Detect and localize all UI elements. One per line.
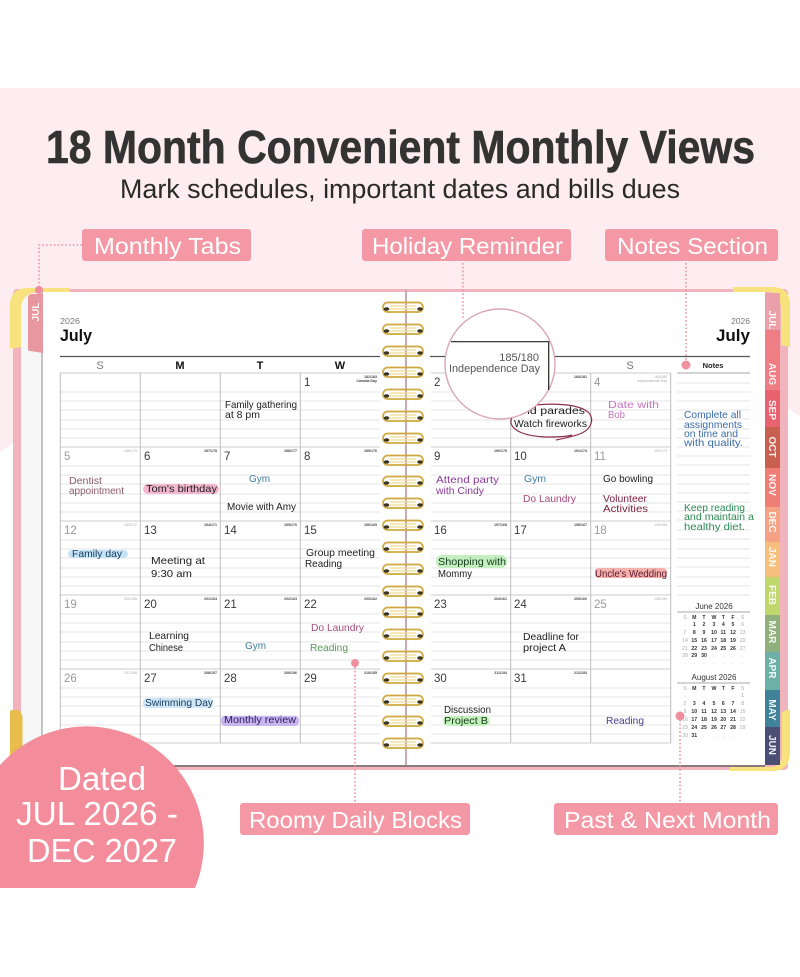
notes handwritten text: healthy diet. [684, 521, 745, 533]
mini calendar: August 2026: . [742, 733, 743, 739]
mini calendar: June 2026: 9 [703, 630, 706, 636]
handwritten entries left page: Chinese [149, 642, 183, 654]
right page date numbers: 211/154 [494, 671, 507, 675]
handwritten entries right page: Watch fireworks [514, 418, 587, 430]
left page date numbers: 19 [64, 599, 77, 611]
handwritten entries right page: with Cindy [435, 485, 485, 497]
left page date numbers: 195/170 [284, 523, 297, 527]
mini calendar: August 2026: 1 [741, 693, 744, 699]
mini calendar: August 2026: . [723, 733, 724, 739]
handwritten entries right page: Volunteer [603, 493, 647, 505]
handwritten entries right page [435, 399, 667, 727]
left page date numbers: 7 [224, 451, 230, 463]
handwritten entries right page: Attend party [436, 474, 500, 486]
mini calendar: August 2026: 14 [730, 709, 736, 715]
fireworks hand-drawn circle [511, 404, 592, 440]
left calendar grid [60, 373, 380, 743]
right page date numbers: 9 [434, 451, 440, 463]
callout: monthly tabs [35, 229, 251, 294]
left page date numbers: 14 [224, 525, 237, 537]
right colored month tabs: SEP [766, 400, 777, 420]
right page date numbers: Independence Day [637, 379, 667, 383]
left page date numbers: 196/169 [364, 523, 377, 527]
mini calendar: June 2026: 12 [730, 630, 736, 636]
mini calendar: August 2026: 16 [682, 717, 688, 723]
mini calendar: June 2026: . [713, 653, 715, 659]
mini calendar: June 2026: 10 [711, 630, 717, 636]
handwritten entries right page: Discussion [444, 704, 491, 716]
mini calendar: June 2026: . [723, 660, 724, 666]
handwritten entries left page: Movie with Amy [227, 501, 297, 513]
mini calendar: August 2026: . [713, 693, 715, 699]
handwritten entries right page: Bob [608, 409, 625, 421]
mini calendar: August 2026: 9 [684, 709, 687, 715]
mini calendar: June 2026: 29 [691, 653, 697, 659]
mini calendar: June 2026: 16 [701, 638, 707, 644]
left page weekday header [60, 356, 380, 372]
handwritten entries left page: Group meeting [306, 547, 375, 559]
mini calendar: August 2026: . [684, 693, 686, 699]
left page month heading: 2026 [60, 316, 80, 326]
callout: monthly tabs: Monthly Tabs [94, 233, 241, 259]
left page date numbers: 207/158 [124, 671, 137, 675]
mini calendar: August 2026: . [694, 693, 695, 699]
mini calendar: August 2026: . [713, 733, 715, 739]
right colored month tabs: OCT [766, 436, 777, 458]
right page date numbers: 4 [594, 377, 601, 389]
left page date numbers: 12 [64, 525, 77, 537]
right page date numbers: 25 [594, 599, 607, 611]
mini calendar: June 2026: . [742, 653, 743, 659]
callout: roomy daily blocks: Roomy Daily Blocks [249, 807, 462, 833]
mini calendar: June 2026: 4 [722, 622, 725, 628]
handwritten entries left page: Gym [245, 640, 266, 652]
mini calendar: August 2026: W [712, 686, 717, 692]
mini calendar: August 2026: 24 [691, 725, 697, 731]
mini calendar: June 2026 [677, 602, 750, 666]
right page date numbers: 192/173 [654, 449, 667, 453]
right page date numbers: 11 [594, 451, 606, 463]
mini calendar: August 2026: 15 [740, 709, 746, 715]
pink background band [0, 88, 800, 452]
mini calendar: June 2026: 22 [691, 646, 697, 652]
right page month heading [716, 316, 751, 345]
mini calendar: June 2026: 17 [711, 638, 717, 644]
right page date numbers: 185/180 [654, 375, 667, 379]
left page date numbers: 29 [304, 673, 317, 685]
handwritten entries right page: Mommy [438, 568, 473, 580]
right colored month tabs: JUN [766, 735, 777, 755]
mini calendar: August 2026: . [703, 693, 705, 699]
magnifier: holiday reminder [445, 309, 555, 419]
left page date numbers: 186/179 [124, 449, 137, 453]
left page date numbers: 22 [304, 599, 317, 611]
mini calendar: August 2026: 28 [730, 725, 736, 731]
callout: roomy daily blocks [240, 659, 470, 835]
handwritten entries right page: Activities [603, 503, 648, 515]
handwritten entries left page: Meeting at [151, 555, 205, 567]
left page date numbers: 8 [304, 451, 310, 463]
notes handwritten text: Keep reading [684, 502, 745, 514]
mini calendar: August 2026: 20 [720, 717, 726, 723]
left page date numbers: 27 [144, 673, 157, 685]
handwritten entries left page: Dentist [69, 475, 102, 487]
mini calendar: August 2026: 17 [691, 717, 697, 723]
left page date numbers: 20 [144, 599, 157, 611]
mini calendar: June 2026: . [732, 660, 734, 666]
handwritten entries right page: Attend parades [501, 405, 585, 417]
mini calendar: June 2026: 14 [682, 638, 688, 644]
left page date numbers: 201/164 [204, 597, 217, 601]
mini calendar: June 2026: S [683, 615, 687, 621]
right page weekday header: Notes [703, 361, 723, 370]
mini calendar: August 2026: . [732, 693, 734, 699]
mini calendar: June 2026: 24 [711, 646, 717, 652]
left page weekday header: W [335, 360, 346, 372]
mini calendar: August 2026: 4 [703, 701, 706, 707]
callout: past and next month [554, 712, 778, 835]
right colored month tabs: MAY [766, 699, 777, 721]
left page date numbers: 5 [64, 451, 70, 463]
mini calendar: June 2026: 26 [730, 646, 736, 652]
mini calendar: June 2026: . [684, 660, 686, 666]
right colored month tabs: FEB [766, 585, 777, 605]
right page weekday header [430, 356, 750, 372]
left month tab: JUL [31, 303, 42, 321]
right page date numbers: 198/167 [574, 523, 587, 527]
mini calendar: June 2026: 3 [713, 622, 716, 628]
mini calendar: June 2026: . [723, 653, 724, 659]
right page date numbers: 212/153 [574, 671, 587, 675]
mini calendar: June 2026: W [712, 615, 717, 621]
mini calendar: June 2026: . [742, 660, 743, 666]
mini calendar: August 2026: 12 [711, 709, 717, 715]
handwritten entries left page: Family gathering [225, 399, 297, 411]
right colored month tabs: DEC [766, 511, 777, 533]
mini calendar: August 2026: 10 [691, 709, 697, 715]
handwritten entries right page: Gym [524, 473, 546, 485]
right page date numbers [434, 375, 667, 685]
mini calendar: August 2026: 19 [711, 717, 717, 723]
right page month heading: 2026 [731, 316, 750, 326]
handwritten entries right page: Uncle's Wedding [595, 568, 667, 580]
right colored month tabs: NOV [766, 474, 777, 496]
right page date numbers: 10 [514, 451, 527, 463]
handwritten entries right page: Date with [608, 399, 659, 411]
right colored month tabs: APR [766, 657, 777, 679]
mini calendar: August 2026: 26 [711, 725, 717, 731]
right colored month tabs [765, 293, 780, 765]
right page weekday header: S [626, 360, 634, 372]
spiral binding [383, 302, 423, 748]
right page date numbers: 205/160 [574, 597, 587, 601]
date range badge: DEC 2027 [27, 832, 177, 869]
handwritten entries right page: project A [523, 642, 566, 654]
right page date numbers: 204/161 [494, 597, 507, 601]
mini calendar: June 2026: . [713, 660, 715, 666]
left page month heading: July [60, 326, 92, 345]
handwritten entries left page: Monthly review [224, 714, 296, 726]
callout: holiday reminder: Holiday Reminder [372, 233, 563, 259]
callout: holiday reminder [362, 229, 571, 320]
left page date numbers: 26 [64, 673, 77, 685]
callout: notes section: Notes Section [617, 233, 768, 259]
mini calendar: June 2026: 13 [740, 630, 746, 636]
right page date numbers: 197/168 [494, 523, 507, 527]
mini calendar: August 2026: 30 [682, 733, 688, 739]
left page date numbers: 209/156 [284, 671, 297, 675]
handwritten entries left page: Family day [72, 548, 123, 560]
mini calendar: August 2026: 2 [684, 701, 687, 707]
handwritten entries left page: at 8 pm [225, 409, 260, 421]
handwritten entries left page: 9:30 am [151, 568, 192, 580]
mini calendar: August 2026: T [702, 686, 706, 692]
right page date numbers: 199/166 [654, 523, 667, 527]
notes handwritten text: Complete all [684, 409, 741, 421]
left page date numbers: 1 [304, 377, 310, 389]
left page date numbers: 203/162 [364, 597, 377, 601]
mini calendar: August 2026: S [741, 686, 745, 692]
left page date numbers: 208/157 [204, 671, 217, 675]
left page weekday header: T [257, 360, 264, 372]
mini calendar: August 2026: . [732, 733, 734, 739]
mini calendar: June 2026: . [694, 660, 695, 666]
mini calendar: June 2026: 8 [693, 630, 696, 636]
planner cover [13, 289, 788, 770]
notes handwritten text [683, 409, 754, 533]
mini calendar: August 2026: 11 [701, 709, 707, 715]
right page date numbers: 190/175 [494, 449, 507, 453]
handwritten entries left page: Swimming Day [145, 697, 214, 709]
date range badge: Dated [58, 760, 146, 797]
handwritten entries right page: Reading [606, 715, 644, 727]
date range badge [0, 726, 204, 888]
mini calendar: August 2026: 5 [713, 701, 716, 707]
callout: past and next month: Past & Next Month [564, 807, 771, 833]
mini calendar: August 2026: 13 [720, 709, 726, 715]
left page date numbers: 188/177 [284, 449, 297, 453]
right page month heading: July [716, 326, 751, 345]
left page date numbers: 6 [144, 451, 150, 463]
mini calendar: June 2026: 19 [730, 638, 736, 644]
mini calendar: June 2026: 30 [701, 653, 707, 659]
left month tab [28, 294, 43, 353]
date range badge: JUL 2026 - [16, 795, 178, 832]
mini calendar: June 2026: 6 [741, 622, 744, 628]
planner right page [407, 292, 765, 765]
right page date numbers: 184/181 [574, 375, 587, 379]
handwritten entries left page: Do Laundry [311, 622, 365, 634]
mini calendar: August 2026: F [731, 686, 735, 692]
mini calendar: June 2026: 5 [732, 622, 735, 628]
mini calendar: June 2026: . [732, 653, 734, 659]
mini calendar: August 2026: 25 [701, 725, 707, 731]
magnifier: holiday reminder: Independence Day [449, 363, 540, 375]
mini calendar: August 2026: 27 [720, 725, 726, 731]
notes handwritten text: and maintain a [684, 511, 754, 523]
mini calendar: August 2026: T [722, 686, 726, 692]
notes handwritten text: on time and [684, 428, 738, 440]
right page date numbers: 16 [434, 525, 447, 537]
mini calendar: August 2026: 6 [722, 701, 725, 707]
right page date numbers: 191/174 [574, 449, 587, 453]
notes handwritten text: assignments [684, 419, 742, 431]
left page weekday header: M [175, 360, 185, 372]
right page date numbers: 24 [514, 599, 527, 611]
handwritten entries left page: Learning [149, 630, 189, 642]
handwritten entries left page: Tom's birthday [146, 483, 218, 495]
mini calendar: August 2026: 3 [693, 701, 696, 707]
left page date numbers: 182/183 [364, 375, 377, 379]
right page date numbers: 2 [434, 377, 440, 389]
notes section lines [677, 373, 750, 595]
handwritten entries right page: Shopping with [438, 556, 506, 568]
mini calendar: August 2026: 23 [682, 725, 688, 731]
left page date numbers: 15 [304, 525, 317, 537]
left page date numbers: 200/165 [124, 597, 137, 601]
handwritten entries left page: Reading [305, 558, 342, 570]
right colored month tabs: AUG [766, 363, 777, 385]
mini calendar: June 2026: 11 [721, 630, 726, 636]
mini calendar: June 2026: 25 [720, 646, 726, 652]
notes handwritten text: with quality. [683, 437, 743, 449]
handwritten entries right page: Deadline for [523, 631, 579, 643]
mini calendar: June 2026: June 2026 [695, 602, 733, 611]
mini calendar: August 2026: . [723, 693, 724, 699]
mini calendar: June 2026: S [741, 615, 745, 621]
right colored month tabs: JUL [766, 311, 777, 329]
handwritten entries right page: Project B [444, 715, 488, 727]
magnifier: holiday reminder: 185/180 [499, 352, 539, 364]
mini calendar: June 2026: 23 [701, 646, 707, 652]
left page date numbers: 187/178 [204, 449, 217, 453]
mini calendar: August 2026: 18 [701, 717, 707, 723]
left page date numbers: 202/163 [284, 597, 297, 601]
mini calendar: August 2026: 31 [691, 733, 697, 739]
handwritten entries left page [69, 399, 375, 726]
mini calendar: August 2026: 22 [740, 717, 746, 723]
mini calendar: June 2026: T [722, 615, 726, 621]
right page date numbers: 30 [434, 673, 447, 685]
yellow cover corners [10, 287, 790, 771]
left page date numbers: 28 [224, 673, 237, 685]
mini calendar: June 2026: 15 [691, 638, 697, 644]
mini calendar: August 2026 [677, 673, 750, 739]
mini calendar: August 2026: . [703, 733, 705, 739]
highlighter marks [68, 484, 667, 726]
right page date numbers: 18 [594, 525, 607, 537]
left page weekday header: S [96, 360, 104, 372]
handwritten entries left page: Gym [249, 473, 270, 485]
left page date numbers: 210/155 [364, 671, 377, 675]
mini calendar: June 2026: 18 [720, 638, 726, 644]
handwritten entries right page: Go bowling [603, 473, 653, 485]
mini calendar: June 2026: 27 [740, 646, 746, 652]
right calendar grid [431, 373, 671, 743]
mini calendar: August 2026: August 2026 [692, 673, 737, 682]
handwritten entries left page: Reading [310, 642, 348, 654]
planner left page [43, 292, 405, 765]
left page date numbers: 21 [224, 599, 237, 611]
mini calendar: August 2026: 21 [730, 717, 736, 723]
left page date numbers: 189/176 [364, 449, 377, 453]
mini calendar: June 2026: M [692, 615, 696, 621]
handwritten entries left page: appointment [69, 485, 124, 497]
right page date numbers: 23 [434, 599, 447, 611]
handwritten entries right page: Do Laundry [523, 493, 577, 505]
mini calendar: June 2026: . [684, 622, 686, 628]
right colored month tabs: MAR [766, 621, 777, 644]
mini calendar: August 2026: 7 [732, 701, 735, 707]
mini calendar: June 2026: 20 [740, 638, 746, 644]
mini calendar: June 2026: . [703, 660, 705, 666]
mini calendar: June 2026: 2 [703, 622, 706, 628]
right colored month tabs: JAN [766, 547, 777, 567]
left page date numbers [64, 375, 377, 685]
left page date numbers: 193/172 [124, 523, 137, 527]
left page date numbers: 194/171 [204, 523, 217, 527]
right page date numbers: 31 [514, 673, 527, 685]
mini calendar: August 2026: 29 [740, 725, 746, 731]
mini calendar: June 2026: F [731, 615, 735, 621]
mini calendar: June 2026: 21 [682, 646, 688, 652]
subtitle: Mark schedules, important dates and bills dues [120, 174, 680, 204]
right page date numbers: 17 [514, 525, 527, 537]
mini calendar: August 2026: S [683, 686, 687, 692]
callout: notes section [605, 229, 778, 370]
mini calendar: August 2026: M [692, 686, 696, 692]
mini calendar: June 2026: 7 [684, 630, 687, 636]
left page month heading [60, 316, 92, 345]
right page date numbers: 206/159 [654, 597, 667, 601]
left page date numbers: Canada Day [356, 379, 377, 383]
mini calendar: June 2026: 1 [693, 622, 696, 628]
left page date numbers: 13 [144, 525, 157, 537]
mini calendar: June 2026: 28 [682, 653, 688, 659]
mini calendar: June 2026: T [702, 615, 706, 621]
mini calendar: August 2026: 8 [741, 701, 744, 707]
